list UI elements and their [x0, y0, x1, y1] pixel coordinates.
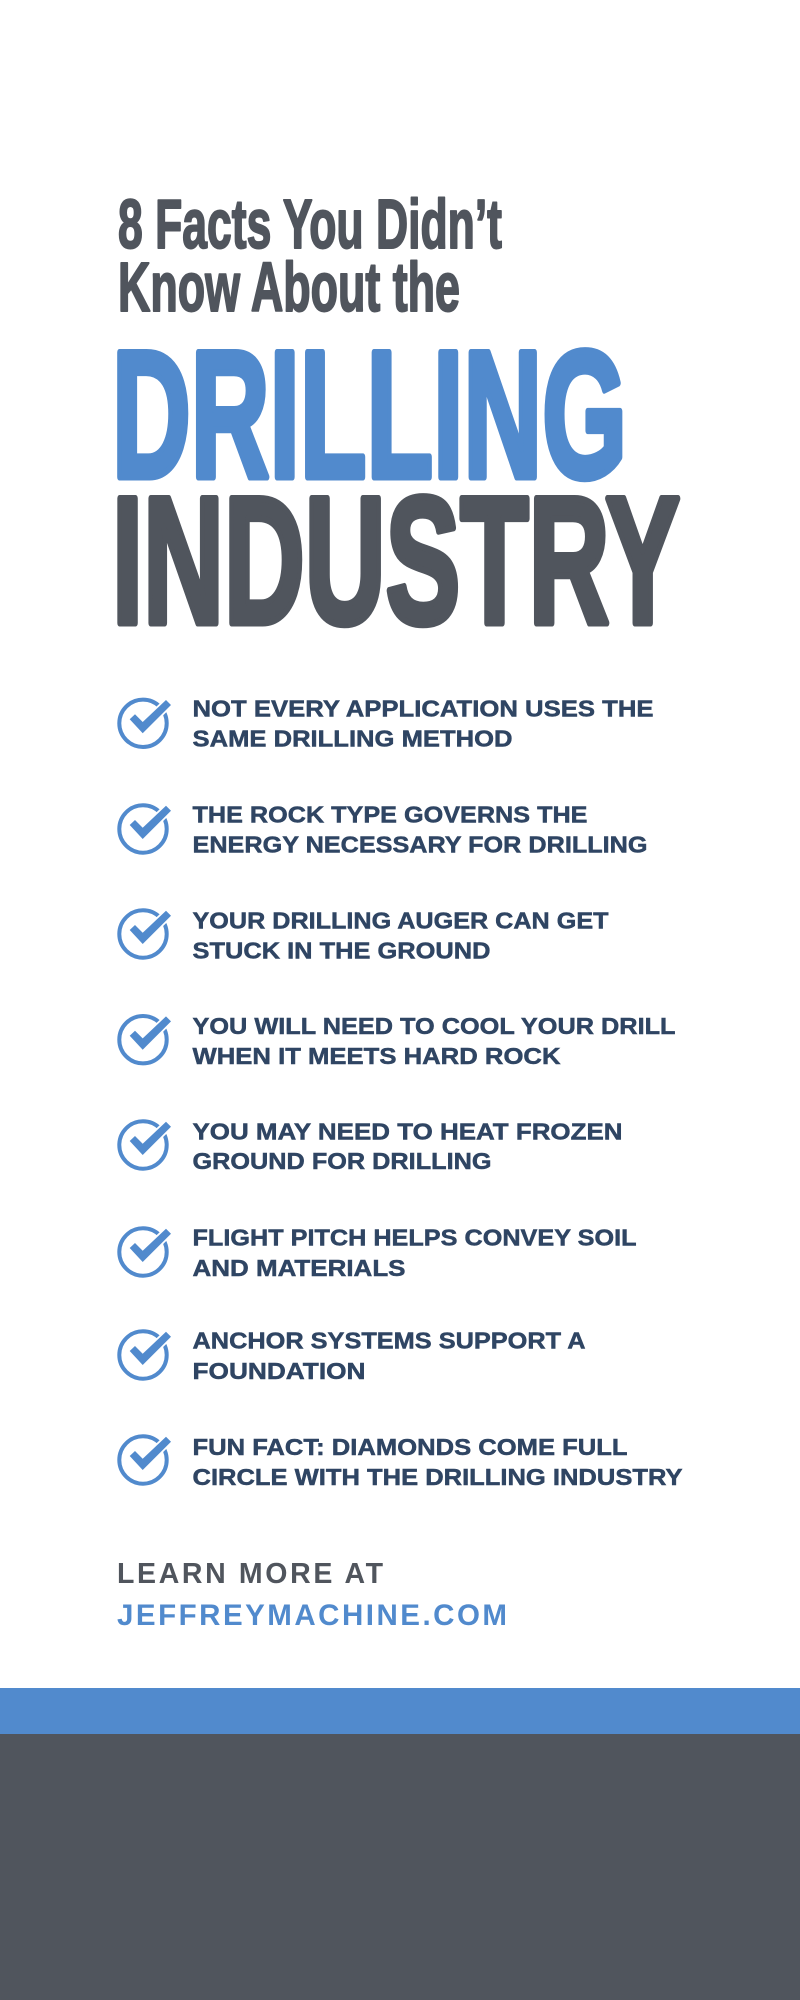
fact 5 text: YOU MAY NEED TO HEAT FROZEN [192, 1118, 622, 1144]
fact 5 text: GROUND FOR DRILLING [192, 1148, 492, 1174]
fact 6 text: AND MATERIALS [192, 1255, 406, 1281]
icon: check mark [119, 1121, 171, 1169]
icon: check mark [119, 700, 171, 747]
fact 6 [119, 1225, 637, 1281]
fact 7 text: ANCHOR SYSTEMS SUPPORT A [192, 1328, 586, 1354]
footer band: blue [0, 1688, 800, 1734]
fact 8 text [192, 1434, 683, 1490]
footer block: dark grey [0, 1734, 800, 2000]
fact 1 text: SAME DRILLING METHOD [192, 726, 512, 752]
fact 1 text [192, 696, 654, 752]
text: learn more at: LEARN MORE AT [117, 1558, 384, 1590]
fact 4 [119, 1013, 676, 1069]
icon: check mark [119, 1228, 171, 1276]
call to action [117, 1558, 507, 1632]
fact 8 [119, 1434, 683, 1490]
title [112, 185, 680, 662]
fact 1 [119, 696, 654, 752]
fact 2 text: THE ROCK TYPE GOVERNS THE [192, 802, 588, 828]
heading: intro line two: Know About the [118, 248, 460, 326]
fact 4 text: YOU WILL NEED TO COOL YOUR DRILL [192, 1013, 676, 1039]
fact 5 text [192, 1118, 622, 1174]
fact 7 text [192, 1328, 586, 1384]
fact 1 text: NOT EVERY APPLICATION USES THE [192, 696, 654, 722]
fact 7 text: FOUNDATION [192, 1358, 366, 1384]
icon: check mark [119, 805, 171, 853]
fact 4 text [192, 1013, 676, 1069]
fact 6 text: FLIGHT PITCH HELPS CONVEY SOIL [192, 1225, 636, 1251]
fact 4 text: WHEN IT MEETS HARD ROCK [192, 1043, 561, 1069]
fact 7 [119, 1328, 586, 1384]
icon: check mark [119, 910, 171, 958]
fact 2 text: ENERGY NECESSARY FOR DRILLING [192, 831, 648, 857]
icon: check mark [119, 1436, 171, 1484]
fact 8 text: FUN FACT: DIAMONDS COME FULL [192, 1434, 628, 1460]
icon: check mark [119, 1331, 171, 1379]
fact 6 text [192, 1225, 636, 1281]
fact 2 [119, 802, 648, 857]
fact 3 text: STUCK IN THE GROUND [192, 937, 490, 963]
text: website: JEFFREYMACHINE.COM [117, 1599, 507, 1632]
fact 3 [119, 907, 609, 963]
fact 2 text [192, 802, 648, 857]
heading: intro line one: 8 Facts You Didn’t [118, 185, 502, 263]
fact 5 [119, 1118, 623, 1174]
fact 8 text: CIRCLE WITH THE DRILLING INDUSTRY [192, 1464, 683, 1490]
fact 3 text [192, 907, 609, 963]
fact list [119, 696, 683, 1490]
fact 3 text: YOUR DRILLING AUGER CAN GET [192, 907, 609, 933]
icon: check mark [119, 1016, 171, 1063]
